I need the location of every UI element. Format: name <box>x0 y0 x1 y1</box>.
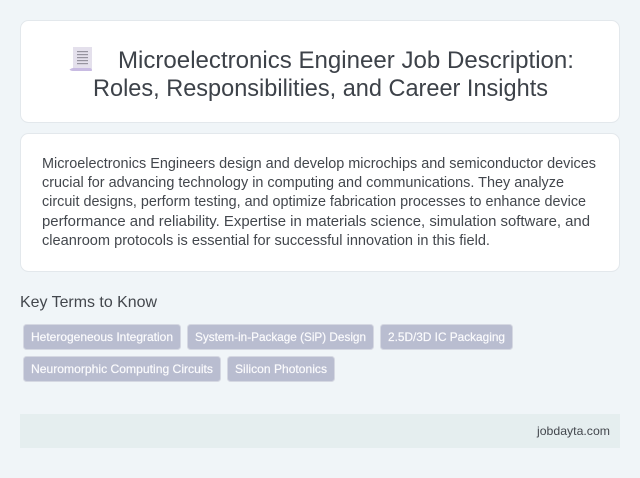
chip: 2.5D/3D IC packaging: 2.5D/3D IC Packaging <box>388 330 505 344</box>
title: Roles, Responsibilities, and Career Insights <box>93 75 548 102</box>
chip: silicon photonics: Silicon Photonics <box>235 362 327 376</box>
chip: silicon photonics <box>228 356 334 382</box>
title <box>93 47 574 102</box>
chip: heterogeneous integration <box>24 324 180 350</box>
text block: description <box>42 156 596 249</box>
title: Microelectronics Engineer Job Description: <box>118 47 574 74</box>
text block: description: cleanroom protocols is essential for successful innovation in this field. <box>42 233 490 249</box>
chip: neuromorphic computing circuits: Neuromorphic Computing Circuits <box>31 362 213 376</box>
panel: title card <box>20 20 620 122</box>
icon: scroll document <box>70 47 92 71</box>
footer: jobdayta.com <box>536 424 610 438</box>
chip: system-in-package design <box>188 324 374 350</box>
chip: system-in-package design: System-in-Package (SiP) Design <box>195 330 366 344</box>
text block: description: Microelectronics Engineers design and develop microchips and semiconductor devices <box>42 156 596 172</box>
chip: 2.5D/3D IC packaging <box>380 324 512 350</box>
chip: heterogeneous integration: Heterogeneous Integration <box>31 330 173 344</box>
chip: neuromorphic computing circuits <box>24 356 220 382</box>
heading: key terms: Key Terms to Know <box>20 294 157 311</box>
footer <box>20 414 620 448</box>
text block: description: circuit designs, perform testing, and optimize fabrication processes to enhance device <box>42 194 586 210</box>
text block: description: crucial for advancing technology in computing and communications. They analyze <box>42 175 564 191</box>
panel: description <box>20 134 620 272</box>
chips: key terms <box>24 324 512 382</box>
text block: description: performance and reliability. Expertise in materials science, simulation software, and <box>42 214 590 230</box>
